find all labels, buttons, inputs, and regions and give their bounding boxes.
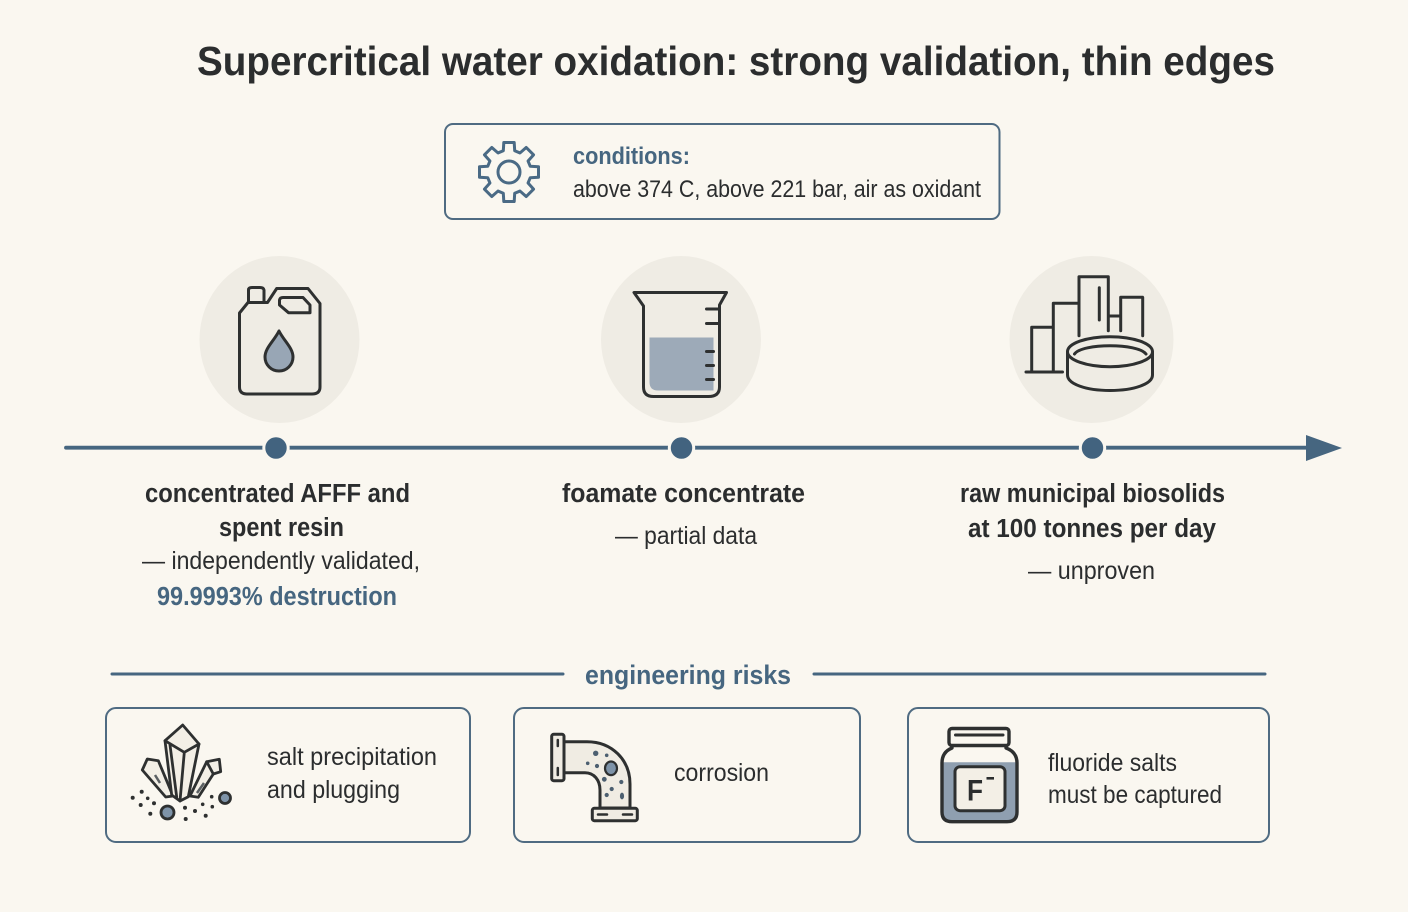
heading: engineering risks: engineering risks [585,660,791,690]
icon: beaker [601,256,761,423]
risk text: salt: salt precipitation [267,743,437,771]
risk text: salt: and plugging [267,776,400,804]
timeline node 2 [669,436,694,460]
text: raw municipal biosolids: at 100 tonnes per day [968,515,1217,543]
text: AFFF and spent resin: 99.9993% destruction [157,583,397,611]
icon: jerrycan with drop [200,256,360,423]
risk text: fluoride: fluoride salts [1048,749,1177,777]
text: AFFF and spent resin: concentrated AFFF and [145,480,410,508]
timeline node 3 [1080,436,1105,460]
text: foamate concentrate: — partial data [615,522,757,550]
timeline node 1 [264,436,288,460]
timeline arrow [66,435,1342,461]
panel: salt precipitation [106,708,470,842]
text: AFFF and spent resin: spent resin [219,514,344,542]
text: raw municipal biosolids [960,480,1225,585]
panel: fluoride salts [908,708,1269,842]
text: AFFF and spent resin: — independently validated, [142,547,420,575]
risk text: fluoride [1048,749,1222,809]
risk text: fluoride: must be captured [1048,781,1222,809]
jar label: F-: F [967,774,983,808]
icon: plant buildings and tank [1010,256,1174,423]
title: Supercritical water oxidation: strong validation, thin edges [197,38,1275,84]
text: raw municipal biosolids: raw municipal biosolids [960,480,1225,508]
text: foamate concentrate: foamate concentrate [562,480,805,508]
text: foamate concentrate [562,480,805,550]
icon: crystals [131,725,230,821]
panel: corrosion [514,708,860,842]
risk text: salt [267,743,437,804]
conditions text: above 374 C, above 221 bar, air as oxidant [573,176,981,203]
conditions heading: conditions: [573,143,690,170]
text: raw municipal biosolids: — unproven [1028,557,1155,585]
risk text: corrosion: corrosion [674,759,769,787]
icon: gear [480,142,538,202]
text: AFFF and spent resin [142,480,420,611]
icon: fluoride jar [942,728,1017,822]
icon: corroded pipe [552,734,637,821]
panel: conditions [445,124,1000,219]
